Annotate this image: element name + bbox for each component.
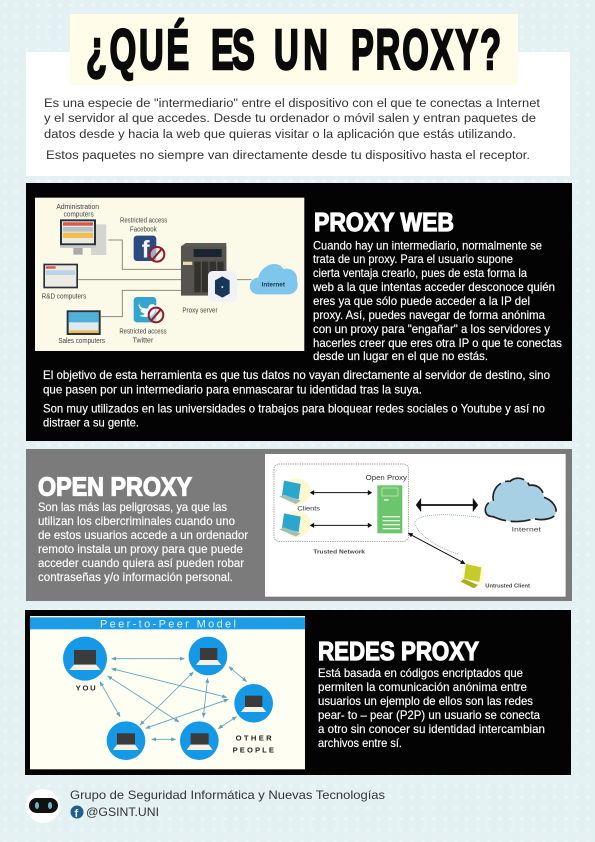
cloud: internet: Internet (262, 281, 286, 288)
open proxy diagram: Open Proxy (366, 473, 407, 482)
proxy web text: con un proxy para "engañar" a los servidores y (313, 322, 550, 336)
title background (70, 14, 518, 85)
proxy web text: Cuando hay un intermediario, normalmente se (313, 238, 542, 252)
open proxy text: contraseñas y/o información personal. (38, 570, 233, 584)
client computers (279, 478, 311, 537)
heading: proxy web: PROXY WEB (314, 207, 454, 237)
icon: restricted facebook (134, 236, 164, 264)
panel: intro (26, 14, 570, 176)
panel: open proxy (26, 449, 572, 601)
proxy web text (43, 238, 562, 430)
open proxy diagram (265, 454, 566, 597)
peer-to-peer diagram (30, 616, 305, 769)
proxy server diagram: Proxy server (182, 307, 218, 314)
icon: facebook: f (74, 808, 78, 820)
proxy web text: que pasen por un intermediario para enmascarar tu identidad tras la suya. (43, 382, 422, 396)
network arrows (100, 659, 247, 739)
open proxy diagram: Clients (297, 506, 320, 512)
icon: restricted facebook: f (142, 237, 151, 264)
proxy web text: trata de un proxy. Para el usuario supone (313, 252, 513, 266)
open proxy diagram: Trusted Network (313, 549, 366, 555)
intro text: Es una especie de "intermediario" entre el dispositivo con el que te conectas a Internet (44, 98, 541, 110)
title: PROXY? (351, 17, 501, 81)
proxy server diagram: Restricted access (119, 328, 167, 335)
labels: YOU (76, 683, 96, 692)
title (86, 17, 501, 81)
proxy web text: cierta ventaja crearlo, pues de esta forma la (313, 266, 527, 280)
icon: restricted twitter (134, 297, 163, 322)
open proxy text: acceder cuando quiera así pueden robar (38, 556, 244, 570)
open proxy text (38, 500, 248, 584)
peer nodes (63, 637, 273, 760)
redes proxy text: pear- to – pear (P2P) un usuario se conecta (318, 708, 540, 722)
icon: facebook (70, 806, 84, 820)
proxy server diagram: Administration (56, 204, 99, 211)
intro text: Estos paquetes no siempre van directamente desde tu dispositivo hasta el receptor. (46, 150, 530, 162)
computer: administration (60, 219, 106, 255)
proxy web text: Son muy utilizados en las universidades o trabajos para bloquear redes sociales o Youtube y así no (43, 402, 545, 416)
proxy web text: El objetivo de esta herramienta es que tus datos no vayan directamente al servidor de destino, sino (43, 368, 550, 382)
proxy server diagram: computers (64, 211, 94, 218)
proxy web text: desde un lugar en el que no estás. (313, 349, 488, 363)
open proxy text: utilizan los cibercriminales cuando uno (38, 514, 235, 528)
proxy web text: distraer a su gente. (43, 416, 139, 430)
proxy server diagram (35, 198, 304, 351)
redes proxy text: archivos entre sí. (318, 736, 402, 750)
untrusted computer (461, 563, 485, 588)
redes proxy text: usuarios un ejemplo de ellos son las redes (318, 694, 533, 708)
proxy server diagram: Sales computers (58, 338, 105, 345)
redes proxy text (318, 666, 545, 750)
computer: R&D (43, 264, 78, 288)
open proxy text: de estos usuarios accede a un ordenador (38, 528, 248, 542)
heading: redes proxy: REDES PROXY (318, 636, 479, 666)
panel: redes proxy (25, 610, 571, 775)
footer (26, 788, 385, 823)
redes proxy text: permiten la comunicación anónima entre (318, 680, 527, 694)
cloud (485, 478, 556, 522)
title: ES (211, 17, 255, 81)
intro text: datos desde y hacia la web que quieras visitar o la aplicación que estás utilizando. (44, 129, 516, 141)
proxy web text: eres ya que sólo puede acceder a la IP del (313, 294, 530, 308)
labels (76, 683, 274, 755)
proxy server diagram: Facebook (130, 226, 157, 233)
panel: proxy web (26, 183, 572, 441)
proxy web text: hacerles creer que eres otra IP o que te conectas (313, 336, 562, 350)
labels: OTHER (236, 734, 272, 743)
open proxy text: Son las más las peligrosas, ya que las (38, 500, 227, 514)
title: ¿QUÉ (86, 17, 189, 81)
icon: robot logo (26, 789, 60, 823)
open proxy server (377, 485, 402, 533)
peer-to-peer diagram: Peer-to-Peer Model (100, 618, 236, 630)
open proxy diagram: Internet (512, 527, 541, 534)
proxy server (181, 243, 237, 302)
arrows (310, 490, 478, 564)
cloud: internet (250, 264, 298, 294)
proxy server diagram: Restricted access (120, 217, 168, 224)
open proxy text: remoto instala un proxy para que puede (38, 542, 243, 556)
labels: PEOPLE (233, 746, 274, 755)
open proxy diagram: Untrusted Client (485, 583, 530, 589)
redes proxy text: a otro sin conocer su identidad intercambian (318, 722, 545, 736)
title: UN (274, 17, 328, 81)
intro text: y el servidor al que accedes. Desde tu ordenador o móvil salen y entran paquetes de (44, 113, 536, 125)
group name: Grupo de Seguridad Informática y Nuevas Tecnologías (70, 788, 385, 802)
proxy server diagram: R&D computers (42, 294, 87, 301)
proxy web text: web a la que intentas acceder desconoce quién (312, 280, 555, 294)
computer: sales (67, 310, 101, 335)
handle: @GSINT.UNI (86, 805, 159, 819)
proxy web text: proxy. Así, puedes navegar de forma anónima (313, 308, 545, 322)
redes proxy text: Está basada en códigos encriptados que (318, 666, 523, 680)
heading: open proxy: OPEN PROXY (38, 472, 192, 502)
proxy server diagram: Twitter (133, 338, 154, 345)
intro text (44, 98, 541, 162)
